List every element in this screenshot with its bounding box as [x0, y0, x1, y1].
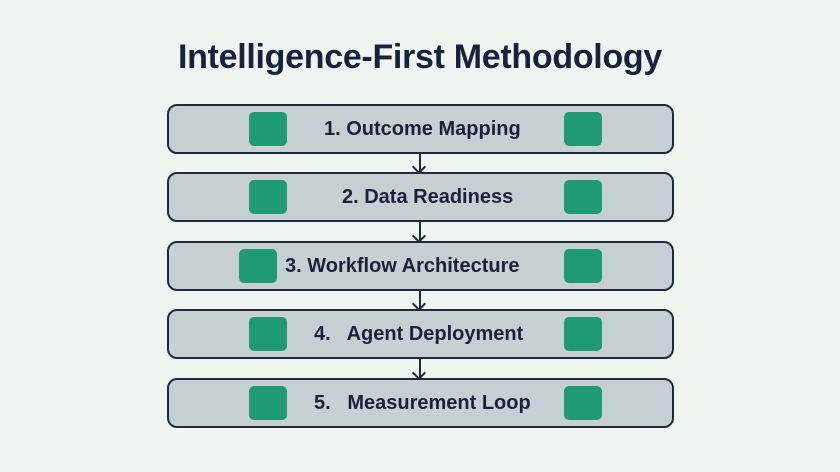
- arrow 4: [412, 359, 426, 378]
- step 5: 5. Measurement Loop: [314, 392, 531, 414]
- arrow 3: [412, 291, 426, 309]
- step 2: [167, 172, 674, 222]
- step 1: [167, 104, 674, 154]
- title: Intelligence-First Methodology: [178, 38, 662, 76]
- step 3: 3. Workflow Architecture: [285, 255, 520, 277]
- step 3: [167, 241, 674, 291]
- step 2: 2. Data Readiness: [342, 186, 513, 208]
- arrow 1: [412, 154, 426, 172]
- step 4: 4. Agent Deployment: [314, 323, 523, 345]
- arrow 2: [412, 222, 426, 241]
- step 4: [167, 309, 674, 359]
- step 1: 1. Outcome Mapping: [324, 118, 521, 140]
- step 5: [167, 378, 674, 428]
